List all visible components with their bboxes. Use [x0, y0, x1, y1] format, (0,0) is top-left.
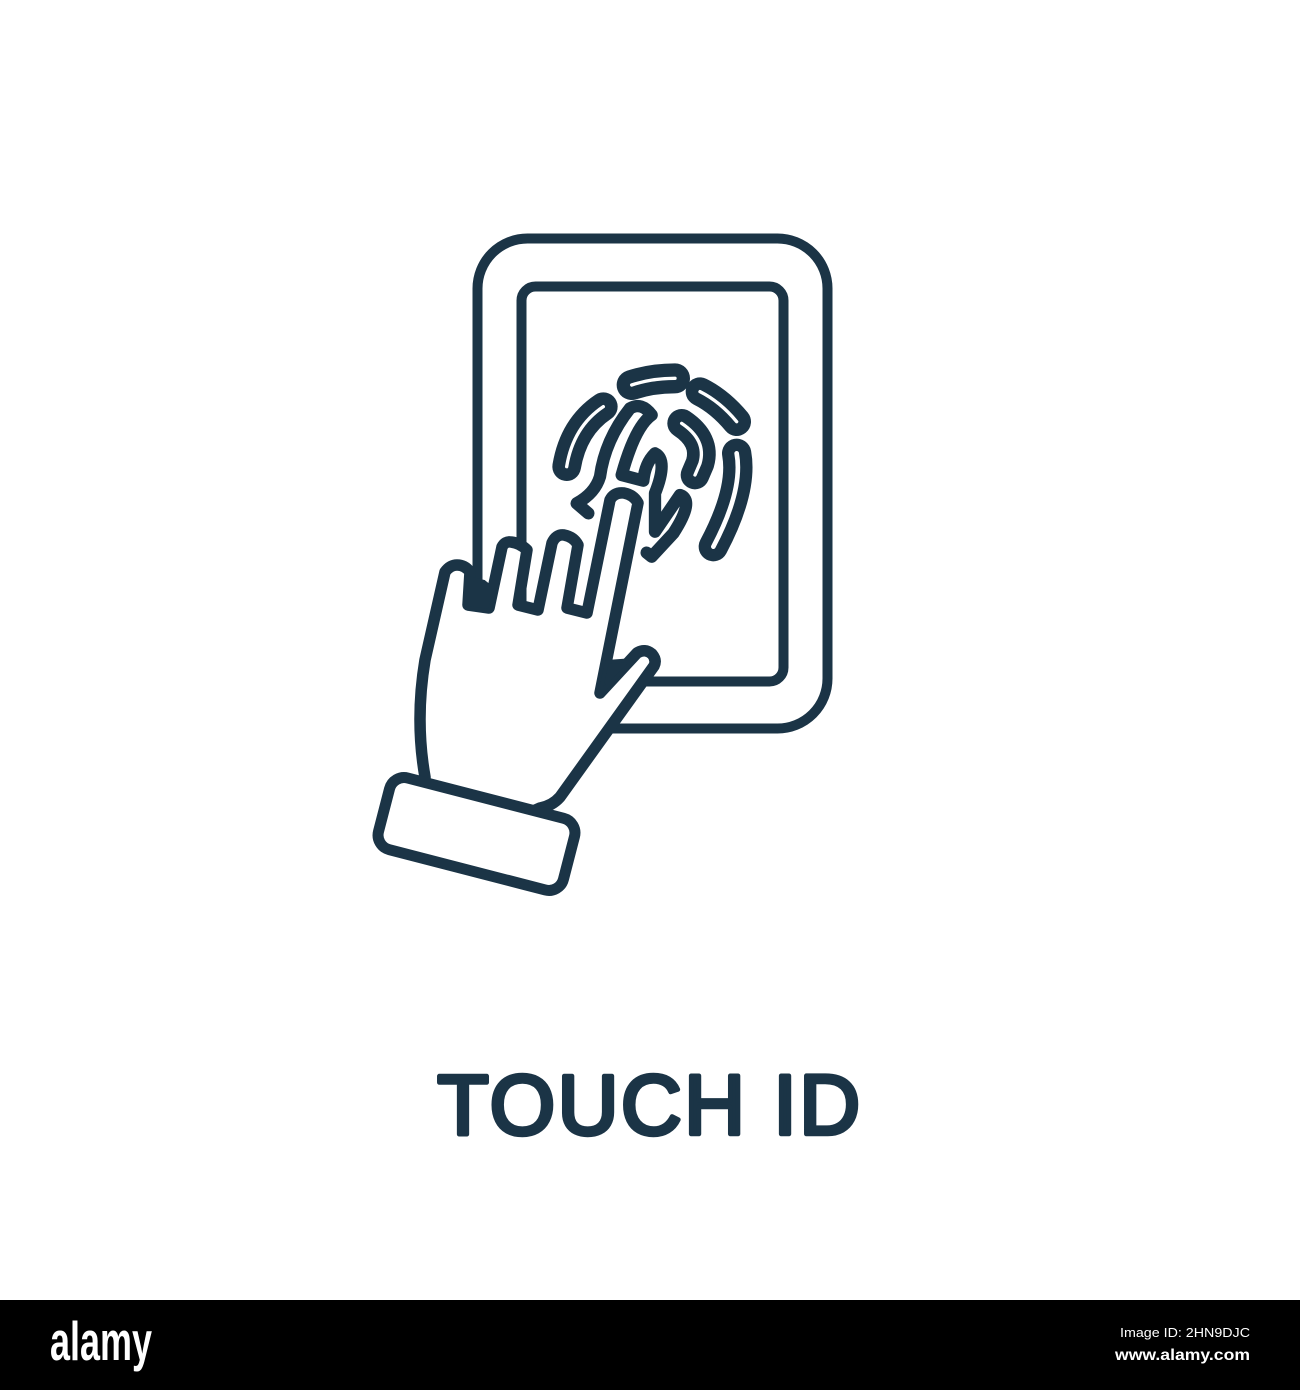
icon: touch id hand on tablet	[375, 238, 828, 894]
icon: hand	[420, 493, 655, 835]
title: TOUCH ID	[437, 1058, 863, 1152]
website url: www.alamy.com	[1114, 1347, 1250, 1364]
icon: shirt cuff	[375, 774, 578, 894]
icon: tablet screen	[522, 286, 784, 682]
icon: wedge between index finger and thumb	[600, 660, 634, 693]
image id: Image ID: 2HN9DJC	[1120, 1325, 1250, 1340]
icon: block between little and ring fingers	[468, 578, 494, 611]
icon: tablet outer frame	[478, 238, 828, 728]
logo: alamy: alamy	[50, 1310, 152, 1372]
footer bar	[0, 1300, 1300, 1390]
icon: fingerprint	[567, 378, 738, 557]
